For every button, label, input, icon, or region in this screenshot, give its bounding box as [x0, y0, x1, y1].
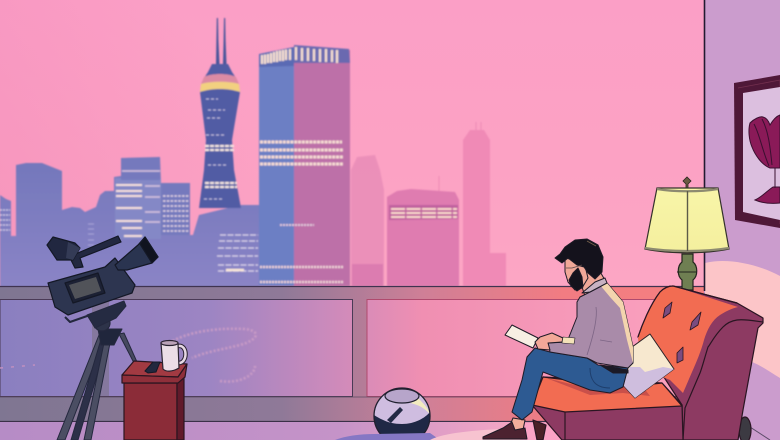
camera microphone	[47, 237, 80, 260]
window frame	[0, 286, 704, 422]
shirt	[548, 283, 633, 368]
belt	[600, 365, 628, 373]
spire tower	[199, 18, 241, 208]
hands	[535, 333, 563, 350]
watch	[562, 337, 575, 344]
trousers	[512, 348, 628, 420]
sky	[0, 0, 704, 290]
phone	[145, 362, 160, 373]
tablet	[505, 325, 538, 348]
armchair	[532, 286, 763, 440]
video camera	[47, 236, 158, 315]
chair back cushion	[638, 286, 738, 393]
rug	[335, 433, 440, 440]
chair seat base	[532, 377, 683, 440]
coffee mug	[161, 340, 186, 371]
neck	[577, 268, 606, 296]
camera handle	[71, 236, 121, 268]
tripod	[57, 301, 137, 440]
beard	[569, 268, 583, 291]
shirt sunlit side	[600, 283, 633, 363]
chair arm edge	[683, 320, 763, 440]
camera screen	[65, 273, 105, 303]
building: pink block	[387, 189, 459, 286]
tall rectangular tower	[259, 45, 350, 286]
pink floor patch	[430, 428, 520, 440]
city skyline	[0, 18, 506, 290]
faint distant towers	[351, 122, 506, 286]
skyline lit windows	[0, 171, 258, 271]
chair wheel	[739, 417, 751, 440]
ankle	[508, 418, 525, 430]
man reading	[483, 239, 633, 439]
left skyline silhouette	[0, 157, 259, 290]
shirt fold	[587, 307, 612, 355]
chair seat cushion	[532, 377, 682, 412]
glass globe vase	[374, 388, 430, 440]
shirt collar	[582, 278, 607, 293]
framed picture	[734, 75, 780, 228]
hair	[555, 239, 603, 279]
chair leg	[533, 420, 546, 440]
chair back	[638, 286, 763, 440]
face	[565, 258, 588, 290]
cushion shadow	[546, 378, 650, 396]
window pane: left	[0, 300, 352, 396]
camera body	[48, 258, 135, 315]
floor lamp	[645, 177, 729, 290]
throw pillow	[623, 334, 674, 398]
camera lens	[115, 237, 158, 270]
city lights reflected in glass	[163, 329, 256, 382]
right wall	[704, 0, 780, 440]
side table	[122, 361, 187, 440]
glasses	[566, 265, 582, 268]
floor	[0, 422, 520, 440]
chair tufts	[663, 302, 701, 363]
shoe	[483, 422, 527, 439]
tulip artwork	[749, 115, 780, 203]
window pane: right	[367, 300, 704, 396]
